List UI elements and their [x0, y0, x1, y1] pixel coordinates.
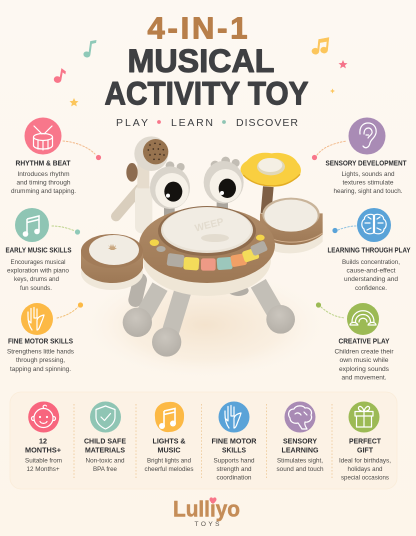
description: own music while [340, 357, 389, 364]
feature: rhythm and beat [11, 118, 101, 195]
heading: MONTHS+ [25, 446, 61, 454]
feature: creative play [316, 302, 394, 382]
icon: drum [24, 118, 62, 154]
feature: sensory development [312, 118, 407, 195]
heading: MATERIALS [85, 446, 125, 454]
connector [338, 226, 356, 230]
benefit: lights and music [144, 402, 194, 473]
heading: PERFECT [349, 436, 382, 446]
heading: 12 [39, 436, 47, 446]
icon: rainbow [347, 303, 379, 335]
benefit: perfect gift [339, 402, 391, 482]
heading [25, 436, 61, 454]
icon: shield [90, 402, 121, 432]
icon: gift [348, 402, 380, 432]
floor shadow [75, 267, 335, 383]
connector [63, 141, 95, 154]
icon: hand [218, 402, 250, 432]
piano keys [150, 235, 268, 271]
description: Bright lights and [147, 458, 191, 464]
description [144, 458, 194, 473]
drum embossing: WEEP [194, 217, 225, 234]
heading: FINE MOTOR SKILLS [8, 336, 73, 346]
description: and movement. [342, 374, 387, 382]
description: and timing through [16, 180, 71, 186]
heading: CREATIVE PLAY [338, 336, 390, 346]
heading: FINE MOTOR [212, 436, 257, 446]
description: holidays and [348, 466, 383, 473]
description: Suitable from [25, 458, 62, 464]
description: Lights, sounds and [342, 171, 395, 178]
description: Introduces rhythm [18, 171, 70, 178]
description: drumming and tapping. [11, 188, 76, 195]
heading: SKILLS [222, 446, 246, 454]
description: understanding and [344, 276, 398, 283]
description: Children create their [334, 348, 394, 356]
tagline: PLAY [116, 117, 148, 129]
toy base and central drum [143, 224, 271, 296]
heading: LIGHTS & [152, 436, 186, 446]
description: tapping and spinning. [10, 366, 71, 373]
heading: GIFT [357, 446, 374, 454]
left drum [81, 234, 143, 290]
heading [282, 436, 319, 454]
benefit: fine motor skills [212, 402, 257, 482]
description: Encourages musical [10, 259, 66, 266]
icon: brain side view [284, 402, 316, 432]
description [7, 348, 75, 373]
benefit: sensory learning [276, 402, 324, 473]
tagline: DISCOVER [236, 117, 298, 129]
description: cause-and-effect [346, 268, 396, 274]
logo: TOYS [194, 521, 220, 528]
heading: SENSORY DEVELOPMENT [326, 158, 407, 168]
connector [317, 141, 347, 155]
description: sound and touch [276, 466, 324, 473]
icon: baby face [28, 402, 59, 432]
feature: early music skills [6, 208, 80, 292]
description: Ideal for birthdays, [339, 458, 391, 464]
description: BPA free [93, 466, 117, 473]
description: hearing, sight and touch. [334, 188, 403, 195]
heading [152, 436, 186, 454]
description: 12 Months+ [26, 466, 60, 473]
feature: learning through play [328, 208, 411, 292]
description: Stimulates sight, [277, 458, 323, 464]
description [342, 259, 400, 292]
heading [84, 436, 126, 454]
description [25, 458, 62, 473]
feature: fine motor skills [7, 302, 83, 373]
icon: hand [21, 303, 53, 335]
heading: LEARNING [282, 446, 319, 454]
description [334, 348, 394, 382]
yellow cymbal [241, 153, 301, 187]
description: through pressing, [16, 357, 65, 364]
tagline [116, 117, 298, 129]
connector [52, 226, 75, 231]
microphone head [134, 136, 168, 171]
eyes [150, 157, 244, 222]
description: fun sounds. [20, 285, 52, 292]
heading: RHYTHM & BEAT [16, 158, 71, 168]
description [334, 171, 403, 195]
drum embossing [194, 217, 229, 242]
logo: Lulliyo [173, 496, 240, 522]
toy illustration [75, 136, 335, 383]
title line: musical: MUSICAL [128, 43, 274, 79]
benefit: 12 months [25, 402, 62, 473]
toy legs [123, 280, 295, 357]
icon: heart [210, 497, 216, 504]
heading: MUSIC [158, 446, 180, 454]
title line: activity toy: ACTIVITY TOY [104, 76, 308, 112]
description: special occasions [341, 474, 390, 482]
icon: music notes [15, 208, 49, 242]
description: strength and [216, 466, 252, 473]
description: cheerful melodies [144, 466, 194, 473]
description: Builds concentration, [342, 259, 400, 266]
description [7, 259, 69, 292]
description: exploring sounds [339, 366, 390, 373]
icon: music blob [155, 402, 184, 432]
description: keys, drums and [14, 276, 59, 283]
heading [212, 436, 257, 454]
title line: 4-in-1: 4-IN-1 [148, 10, 248, 46]
connector [321, 307, 345, 318]
description [339, 458, 391, 482]
heading: EARLY MUSIC SKILLS [6, 246, 72, 254]
description [276, 458, 324, 473]
heading [349, 436, 382, 454]
icon: ear [348, 118, 386, 154]
description: Supports hand [214, 458, 255, 464]
description: textures stimulate [342, 180, 394, 186]
description: coordination [216, 474, 252, 482]
decorative notes and stars [53, 36, 348, 106]
right drum and cymbal [241, 153, 323, 253]
description [11, 171, 76, 195]
icon: brain [357, 208, 391, 242]
heading: SENSORY [283, 436, 317, 446]
title [104, 10, 308, 112]
connector [57, 307, 78, 318]
benefit: child safe materials [84, 402, 126, 473]
description: exploration with piano [7, 268, 69, 274]
description [86, 458, 125, 473]
description: Non-toxic and [86, 458, 125, 464]
panel: benefits [10, 392, 397, 489]
description [214, 458, 255, 482]
heading: CHILD SAFE [84, 436, 126, 446]
tagline: LEARN [171, 117, 213, 129]
description: confidence. [355, 285, 387, 292]
mic stand [116, 136, 168, 233]
description: Strengthens little hands [7, 348, 75, 356]
